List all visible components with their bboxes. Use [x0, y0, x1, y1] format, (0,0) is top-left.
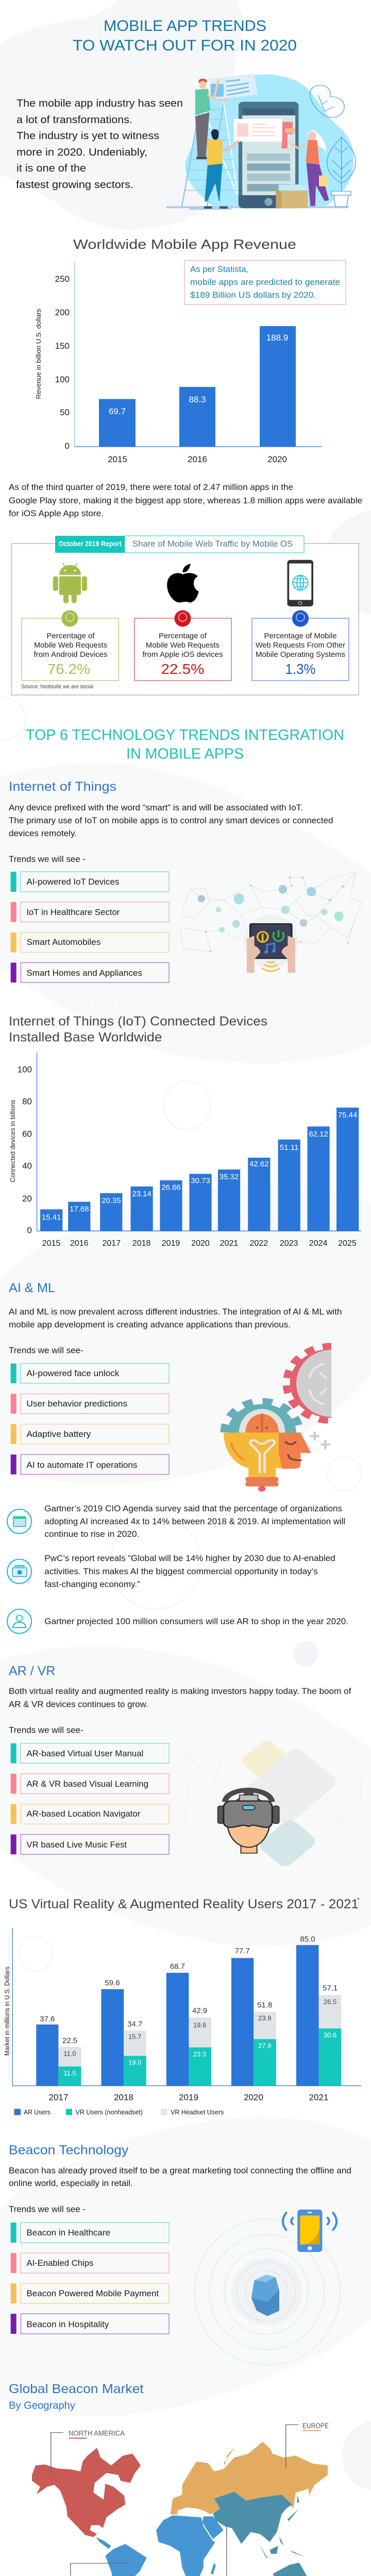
section heading: beacon technology: Beacon Technology [9, 2143, 129, 2158]
bar chart: iot connected devices: 2020 [191, 1239, 210, 1248]
bar chart: us vr ar users [4, 1928, 361, 2116]
bar chart: worldwide mobile app revenue [35, 262, 322, 464]
card: apple share: Percentage of [159, 632, 207, 640]
trend item: IoT in Healthcare Sector [26, 907, 120, 917]
card: apple share: 22.5% [161, 661, 204, 677]
trend item [11, 2283, 169, 2303]
bars: 2018: 59.6 [105, 1979, 120, 1988]
title: TO WATCH OUT FOR IN 2020 [73, 37, 297, 54]
bars: 2020 [231, 1946, 276, 2086]
text: app store counts: for iOS Apple App store. [9, 509, 104, 518]
bars: 2019: 23.3 [193, 2050, 206, 2058]
bars: 2021: 26.5 [324, 1998, 336, 2006]
section heading: internet of things: Internet of Things [9, 779, 116, 794]
bar chart: iot connected devices: 40 [22, 1161, 32, 1171]
bar chart: iot connected devices: 42.62 [249, 1160, 269, 1168]
heading: iot connected devices: Installed Base Worldwide [9, 1030, 162, 1045]
illustration: connected devices network and tablet [180, 872, 362, 973]
bars: 2018: 19.0 [128, 2059, 141, 2066]
bar chart: us vr ar users: 2020 [244, 2093, 263, 2102]
section heading: ar vr: AR / VR [9, 1664, 55, 1678]
bar chart: iot connected devices: 100 [18, 1064, 32, 1075]
text: iot description: The primary use of IoT on mobile apps is to control any smart devices or connected [9, 816, 333, 825]
bars: 2017: 37.6 [40, 2014, 55, 2023]
bar chart: worldwide mobile app revenue: 0 [65, 441, 70, 451]
trend item: Beacon in Healthcare [26, 2228, 110, 2238]
trend item: VR based Live Music Fest [26, 1840, 127, 1850]
bar chart: worldwide mobile app revenue: 250 [55, 274, 70, 284]
bar chart: us vr ar users: 2018 [114, 2093, 133, 2102]
intro text: The industry is yet to witness [16, 130, 159, 142]
intro text: fastest growing sectors. [16, 179, 133, 191]
region: north america [32, 2448, 141, 2537]
list: ai trends [11, 1363, 169, 1475]
text: app store counts: Google Play store, making it the biggest app store, whereas 1.8 million apps were available [9, 496, 362, 505]
stat: gartner AR shoppers: Gartner projected 100 million consumers will use AR to shop in the year 2020. [44, 1616, 348, 1626]
bar chart: worldwide mobile app revenue: 88.3 [189, 395, 206, 404]
bar chart: iot connected devices: 15.41 [42, 1213, 61, 1222]
icon: calendar [7, 1510, 31, 1533]
card: other OS share: Percentage of Mobile [264, 632, 337, 640]
legend: AR Users [24, 2108, 50, 2116]
label: north america: NORTH AMERICA [69, 2429, 125, 2437]
icon: phone with globe [287, 560, 313, 606]
text: beacon description [9, 2165, 351, 2214]
text: beacon description: online world, especially in retail. [9, 2178, 133, 2188]
panel: share of mobile web traffic [11, 536, 359, 695]
bars: 2017 [36, 2014, 81, 2086]
trend item: AR-based Virtual User Manual [26, 1749, 143, 1758]
heading: iot connected devices [9, 1014, 267, 1045]
bar chart: worldwide mobile app revenue: 2016 [188, 454, 207, 464]
stat: gartner cio agenda: continue to rise in 2020. [44, 1529, 139, 1539]
bar chart: iot connected devices: Connected devices in billions [9, 1100, 16, 1182]
text: app store counts [9, 482, 362, 518]
bars: 2021 [296, 1935, 341, 2086]
heading: us vr ar users: US Virtual Reality & Augmented Reality Users 2017 - 2021 [9, 1897, 359, 1911]
trend item: Adaptive battery [26, 1429, 91, 1439]
list: iot trends [11, 872, 169, 982]
stat: pwc report: PwC’s report reveals “Global will be 14% higher by 2030 due to AI-enabled [44, 1553, 335, 1563]
text: ai and ml description: mobile app development is creating advance applications than previous. [9, 1319, 291, 1329]
text: ar vr description [9, 1686, 351, 1735]
intro text: more in 2020. Undeniably, [16, 147, 147, 158]
intro text: The mobile app industry has seen [16, 98, 183, 109]
title: MOBILE APP TRENDS [104, 18, 266, 35]
text: iot description: Trends we will see - [9, 854, 86, 864]
text: iot description: Any device prefixed with the word “smart” is and will be associated with IoT. [9, 803, 303, 812]
region: europe and russia [171, 2442, 328, 2514]
bars: 2018: 15.7 [128, 2032, 141, 2040]
intro text: a lot of transformations. [16, 114, 132, 126]
bar chart: iot connected devices: 2021 [220, 1239, 238, 1248]
bar chart: iot connected devices: 30.73 [191, 1177, 210, 1185]
trend item: AR & VR based Visual Learning [26, 1779, 148, 1789]
list: ar vr trends [11, 1743, 169, 1854]
callout: statista prediction [184, 261, 346, 304]
trend item [11, 2314, 169, 2334]
bars: 2021: 30.6 [324, 2031, 336, 2039]
stat: pwc report [7, 1553, 335, 1589]
bar chart: iot connected devices: 0 [27, 1225, 32, 1235]
text: app store counts: As of the third quarter of 2019, there were total of 2.47 million apps in the [9, 482, 293, 492]
stat: gartner cio agenda: Gartner’s 2019 CIO Agenda survey said that the percentage of organizations [44, 1503, 342, 1514]
card: android share [22, 610, 119, 681]
bar chart: iot connected devices: 2022 [250, 1239, 268, 1248]
stat: pwc report: fast-changing economy.” [44, 1579, 140, 1589]
bar chart: us vr ar users: Market in millions in U.S. Dollars [4, 1967, 11, 2056]
bar chart: iot connected devices: 35.32 [220, 1173, 239, 1181]
bar chart: worldwide mobile app revenue: 200 [55, 308, 70, 317]
illustration: gears and lightbulb head [221, 1343, 331, 1492]
card: other OS share: 1.3% [285, 661, 315, 677]
trend item: Beacon in Hospitality [26, 2319, 109, 2329]
text: beacon description: Beacon has already proved itself to be a great marketing tool connecting the offline and [9, 2165, 351, 2175]
stat: pwc report: activities. This makes AI the biggest commercial opportunity in today’s [44, 1566, 318, 1577]
trend item: Beacon Powered Mobile Payment [26, 2289, 159, 2298]
heading: global beacon market: By Geography [9, 2400, 75, 2412]
bar chart: iot connected devices: 2015 [42, 1239, 60, 1248]
card: android share: Percentage of [46, 632, 95, 640]
region: asia pacific [213, 2492, 329, 2576]
bar chart: iot connected devices: 20.35 [102, 1196, 121, 1205]
bar chart: worldwide mobile app revenue: 100 [55, 375, 70, 384]
bar chart: iot connected devices: 60 [22, 1129, 32, 1139]
trend item [11, 2223, 169, 2243]
trend item [11, 962, 169, 982]
bars: 2019: 68.7 [170, 1962, 185, 1971]
bars: 2017: 11.5 [63, 2070, 76, 2077]
bar chart: iot connected devices: 2023 [280, 1239, 298, 1248]
card: other OS share: Web Requests From Other [256, 641, 345, 650]
trend item: AR-based Location Navigator [26, 1809, 141, 1819]
bar chart: worldwide mobile app revenue: 2015 [108, 454, 127, 464]
trend item: Smart Homes and Appliances [26, 968, 142, 978]
trend item: AI to automate IT operations [26, 1460, 137, 1470]
trend item [11, 1454, 169, 1475]
heading: global beacon market: Global Beacon Market [9, 2382, 144, 2396]
bar chart: iot connected devices: 75.44 [338, 1111, 357, 1120]
card: other OS share: Mobile Operating Systems [256, 650, 345, 659]
bar chart: us vr ar users: 2017 [48, 2093, 68, 2102]
bars: 2017: 11.0 [63, 2049, 76, 2057]
legend [14, 2108, 224, 2116]
label: europe: EUROPE [302, 2421, 329, 2430]
panel heading: Share of Mobile Web Traffic by Mobile OS [132, 539, 293, 549]
text: ar vr description: Both virtual reality and augmented reality is making investors happy today. The boom of [9, 1686, 351, 1696]
bar chart: worldwide mobile app revenue: 150 [55, 341, 70, 351]
heading: worldwide revenue: Worldwide Mobile App Revenue [73, 236, 296, 252]
text: ai and ml description: Trends we will see- [9, 1346, 83, 1355]
heading: us vr ar users: * [357, 1896, 360, 1904]
trend item [11, 1804, 169, 1824]
bar chart: iot connected devices: 51.11 [280, 1143, 298, 1152]
leader lines [51, 2425, 299, 2576]
card: apple share [134, 610, 231, 681]
trend item [11, 902, 169, 922]
trend item: AI-powered IoT Devices [26, 877, 119, 887]
stat: gartner cio agenda: adopting AI increased 4x to 14% between 2018 & 2019. AI implementation will [44, 1516, 345, 1526]
bar chart: iot connected devices: 2017 [103, 1239, 121, 1248]
bar chart: iot connected devices: 62.12 [309, 1130, 328, 1139]
bar chart: iot connected devices: 2019 [162, 1239, 180, 1248]
bars: 2020: 51.8 [257, 2001, 272, 2010]
bar chart: worldwide mobile app revenue: Revenue in billion U.S. dollars [35, 309, 42, 399]
section heading: ai and ml: AI & ML [9, 1281, 55, 1295]
bar chart: iot connected devices: 23.14 [132, 1190, 151, 1198]
text: ar vr description: AR & VR devices continues to grow. [9, 1699, 148, 1709]
bar chart: iot connected devices: 20 [22, 1194, 32, 1204]
bar chart: iot connected devices: 17.68 [70, 1205, 89, 1214]
list: beacon trends [11, 2223, 169, 2334]
trend item [11, 2253, 169, 2273]
title [73, 18, 297, 54]
bar chart: worldwide mobile app revenue: 69.7 [109, 406, 126, 416]
callout: statista prediction: As per Statista, [190, 264, 248, 274]
stat: gartner AR shoppers [7, 1609, 348, 1633]
text: ai and ml description [9, 1307, 342, 1355]
card: android share: 76.2% [47, 661, 90, 677]
heading: global beacon market [9, 2382, 144, 2412]
trend item: User behavior predictions [26, 1399, 127, 1409]
trend item: Smart Automobiles [26, 937, 100, 947]
bar chart: iot connected devices: 26.66 [161, 1183, 181, 1192]
card: apple share: from Apple iOS devices [142, 650, 223, 659]
icon: money [7, 1559, 31, 1584]
bars: 2017: 22.5 [62, 2036, 77, 2045]
stat: gartner cio agenda [7, 1503, 345, 1539]
bar chart: worldwide mobile app revenue: 188.9 [266, 333, 288, 343]
trend item [11, 1394, 169, 1414]
bars: 2019 [166, 1962, 211, 2086]
card: android share: Mobile Web Requests [34, 641, 107, 650]
text: beacon description: Trends we will see - [9, 2204, 86, 2214]
map: global beacon market by region [32, 2421, 329, 2576]
trend item [11, 1774, 169, 1794]
bars: 2019: 42.9 [192, 2007, 207, 2015]
text: iot description [9, 803, 333, 864]
report tag [55, 536, 125, 553]
bars: 2021: 85.0 [300, 1935, 315, 1943]
illustration: beacon and phone [195, 2210, 340, 2365]
heading: top 6 technology trends: IN MOBILE APPS [126, 746, 244, 762]
bar chart: iot connected devices: 2018 [132, 1239, 150, 1248]
illustration: vr headset [176, 1731, 362, 1869]
legend: VR Headset Users [171, 2108, 224, 2116]
text: ar vr description: Trends we will see- [9, 1725, 83, 1735]
trend item [11, 1835, 169, 1854]
trend item [11, 1363, 169, 1383]
bar chart: iot connected devices: 2016 [70, 1239, 89, 1248]
text: iot description: devices remotely. [9, 828, 77, 838]
trend item [11, 872, 169, 892]
intro text [16, 98, 183, 191]
callout: statista prediction: mobile apps are predicted to generate [190, 277, 340, 287]
bar chart: worldwide mobile app revenue: 2020 [267, 454, 287, 464]
bars: 2020: 77.7 [235, 1946, 250, 1955]
card: other OS share [252, 610, 349, 681]
trend item: AI-Enabled Chips [26, 2258, 93, 2268]
callout: statista prediction: $189 Billion US dollars by 2020. [190, 290, 316, 300]
intro text: it is one of the [16, 163, 86, 174]
bar chart: worldwide mobile app revenue: 50 [60, 408, 70, 417]
trend item: AI-powered face unlock [26, 1368, 120, 1378]
region: lamea [96, 2515, 224, 2576]
trend item [11, 1424, 169, 1444]
bar chart: us vr ar users: 2021 [309, 2093, 328, 2102]
icon: apple [167, 564, 199, 602]
illustration: team building a mobile app [166, 74, 356, 210]
text: ai and ml description: AI and ML is now prevalent across different industries. The integration of AI & ML with [9, 1307, 342, 1317]
bar chart: iot connected devices: 80 [22, 1096, 32, 1107]
bar chart: iot connected devices [9, 1053, 361, 1248]
bar chart: us vr ar users: 2019 [179, 2093, 198, 2102]
bars: 2018: 34.7 [127, 2020, 142, 2028]
bars: 2020: 27.9 [258, 2042, 271, 2049]
card: apple share: Mobile Web Requests [146, 641, 220, 650]
trend item [11, 1743, 169, 1763]
panel heading [125, 536, 304, 553]
bar chart: iot connected devices: 2025 [338, 1239, 357, 1248]
bars: 2018 [101, 1979, 146, 2086]
icon: android [53, 563, 87, 603]
icon: person [7, 1609, 31, 1633]
bars: 2021: 57.1 [323, 1984, 338, 1992]
card: android share: from Android Devices [34, 650, 107, 659]
bars: 2019: 19.6 [193, 2021, 206, 2029]
heading: top 6 technology trends [26, 727, 344, 762]
report tag: October 2019 Report [59, 540, 122, 548]
legend: VR Users (nonheadset) [75, 2108, 143, 2116]
bars: 2020: 23.9 [258, 2014, 271, 2022]
heading: iot connected devices: Internet of Things (IoT) Connected Devices [9, 1014, 267, 1029]
source note: Source: hootsuite we are social [21, 684, 93, 690]
heading: top 6 technology trends: TOP 6 TECHNOLOGY TRENDS INTEGRATION [26, 727, 344, 743]
trend item [11, 933, 169, 952]
bar chart: iot connected devices: 2024 [309, 1239, 327, 1248]
